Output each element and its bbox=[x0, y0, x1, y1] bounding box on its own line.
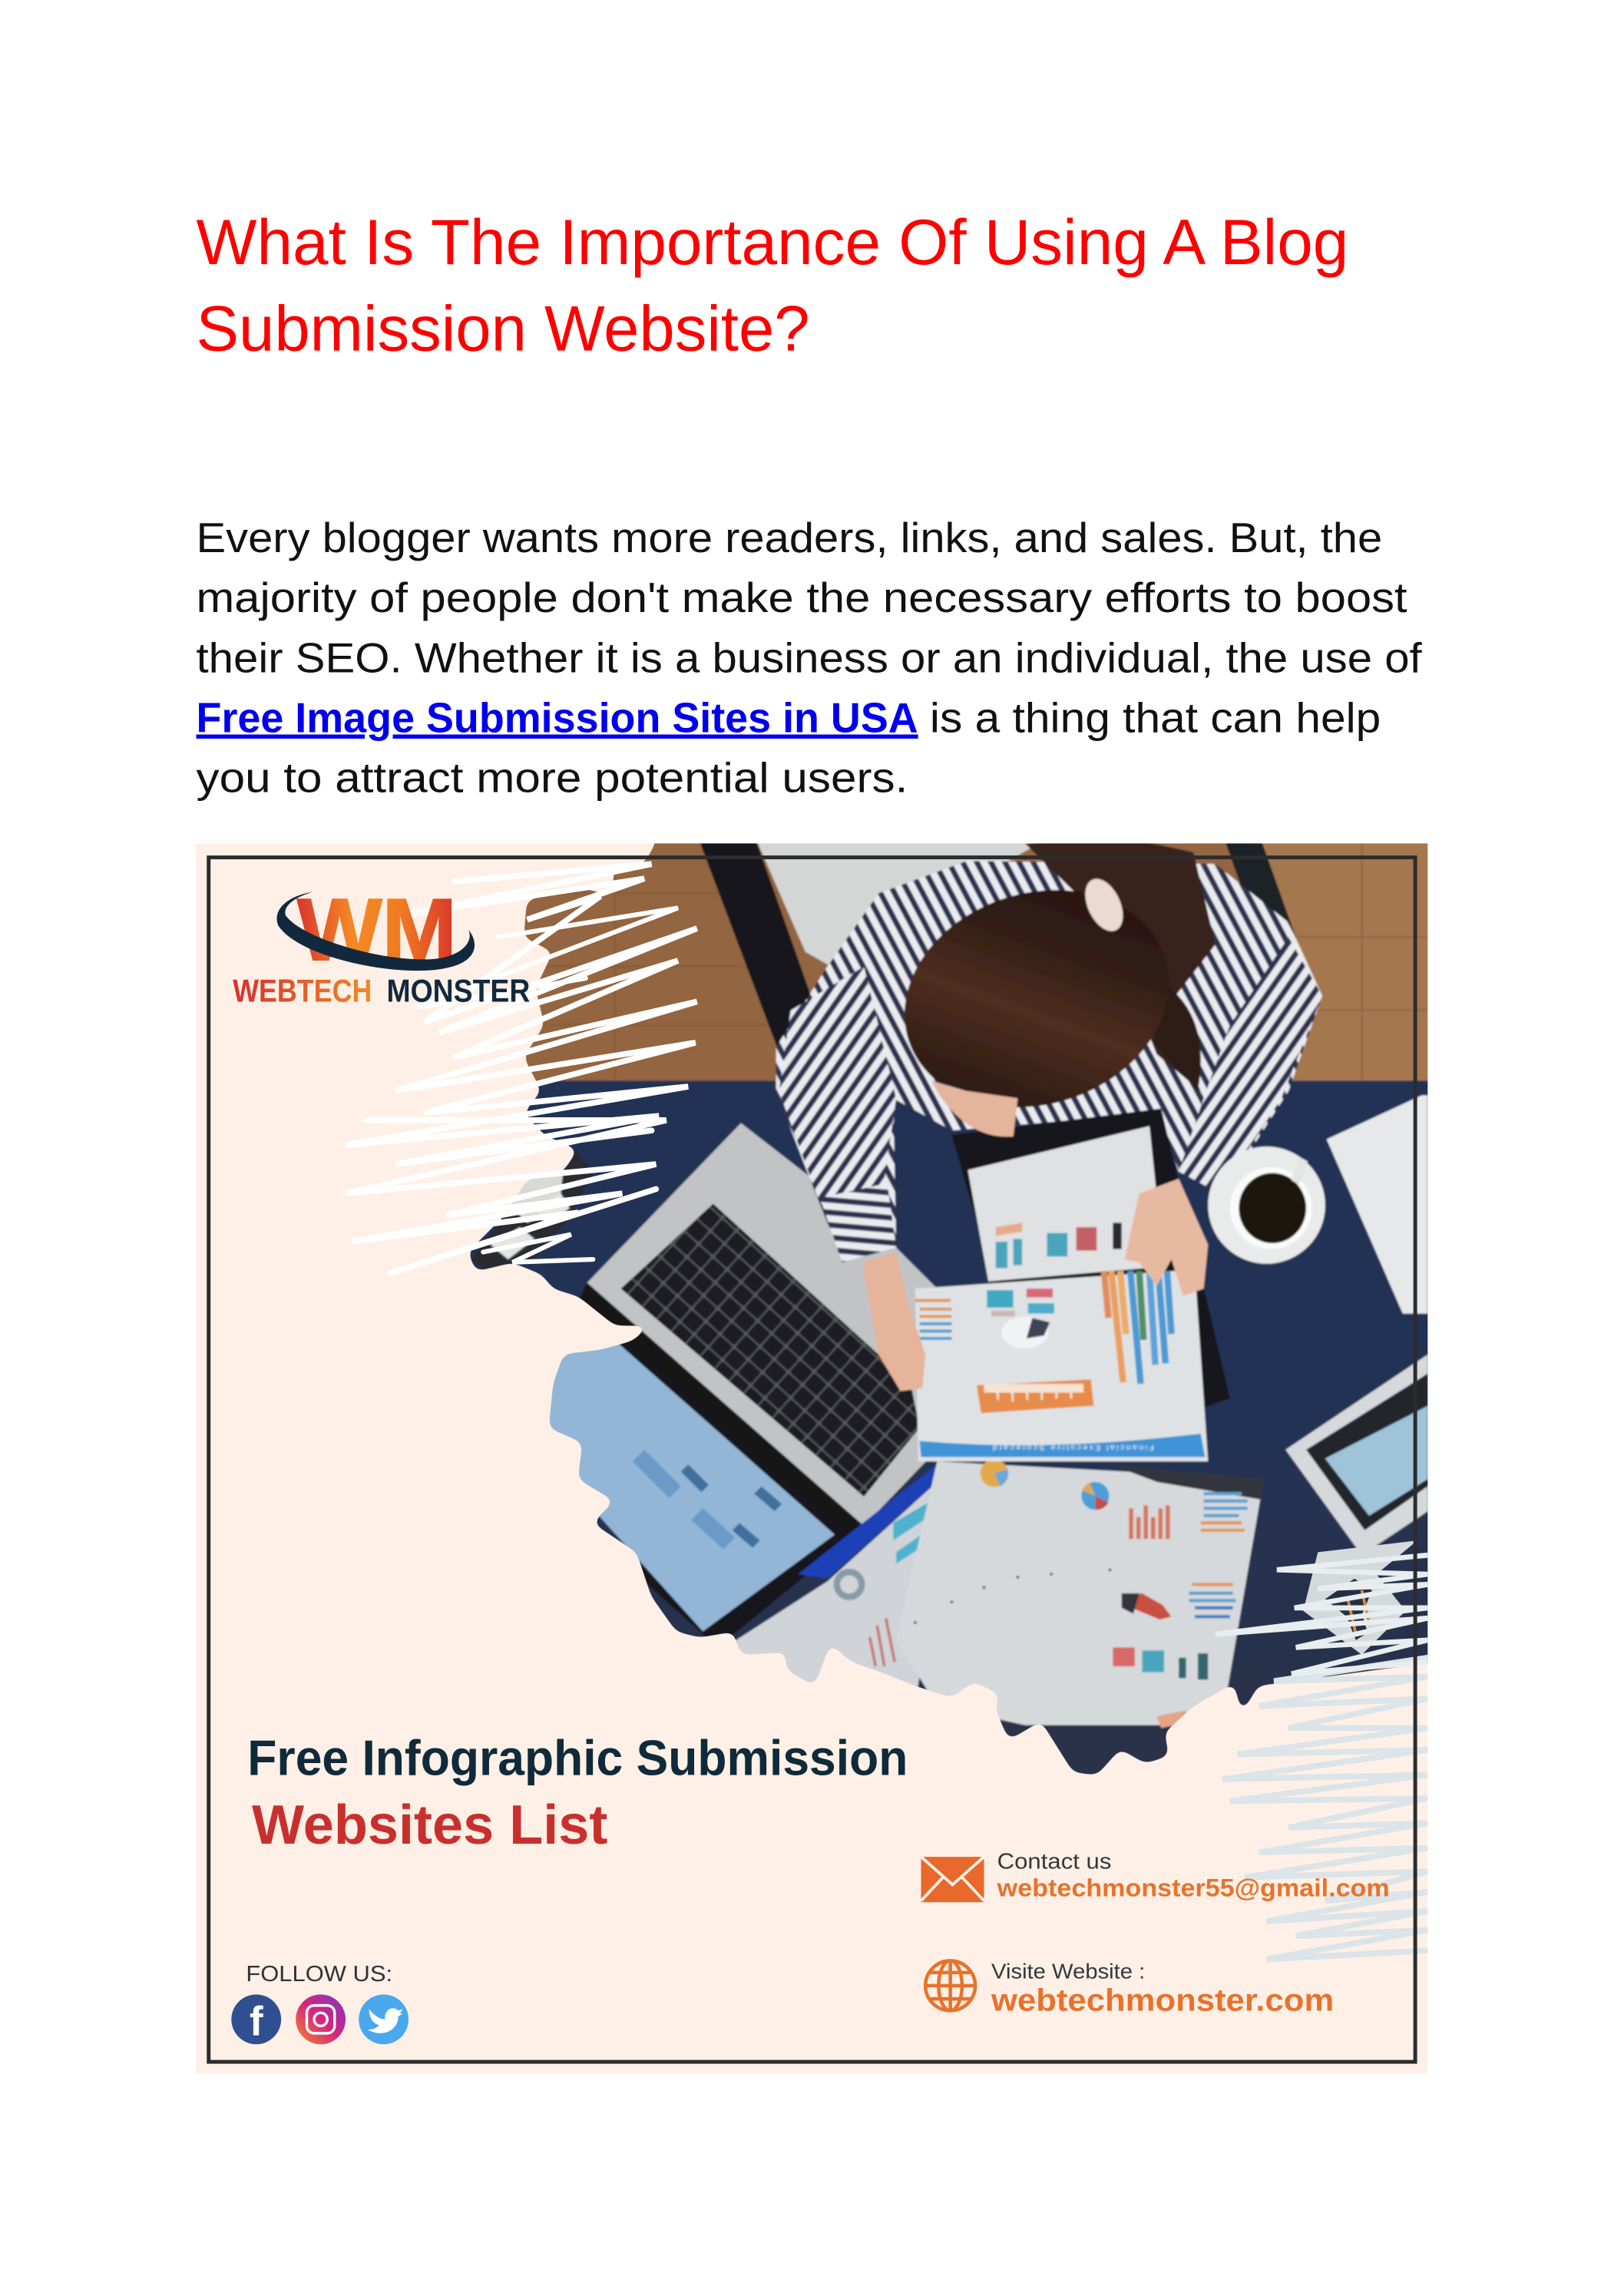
intro paragraph: you to attract more potential users. bbox=[197, 755, 908, 802]
panel: promo image bbox=[197, 835, 1435, 2073]
hair bbox=[903, 843, 1216, 1109]
upper report on black clipboard bbox=[952, 1109, 1230, 1409]
forehead bbox=[931, 1080, 1017, 1136]
right arm bbox=[1179, 937, 1322, 1193]
main report held by woman bbox=[915, 1269, 1208, 1461]
intro paragraph: their SEO. Whether it is a business or an individual, the use of bbox=[197, 634, 1423, 681]
chair bbox=[699, 843, 1296, 1047]
follow us bbox=[231, 1962, 408, 2045]
logo: Webtech Monster: WM bbox=[297, 881, 457, 979]
lower report pages bbox=[896, 1459, 1264, 1728]
icon: instagram bbox=[296, 1994, 346, 2044]
pencil holder with strokes bbox=[1216, 1540, 1427, 1674]
wood floor bbox=[524, 843, 1241, 1082]
headline: websites list: Websites List bbox=[252, 1794, 607, 1856]
white tablet top right bbox=[1327, 1095, 1427, 1314]
main report held by woman: Financial Executive Scorecard bbox=[993, 1443, 1154, 1451]
laptop base bbox=[578, 1123, 937, 1537]
icon: twitter bbox=[359, 1994, 408, 2044]
intro paragraph: Every blogger wants more readers, links, and sales. But, the bbox=[197, 514, 1382, 561]
intro paragraph: majority of people don't make the necessary efforts to boost bbox=[197, 574, 1407, 621]
title bbox=[197, 206, 1348, 365]
intro paragraph bbox=[197, 514, 1423, 802]
frame bbox=[209, 858, 1415, 2062]
left arm bbox=[779, 967, 896, 1204]
intro paragraph: is a thing that can help bbox=[930, 695, 1381, 742]
contact block: webtechmonster55@gmail.com bbox=[997, 1874, 1390, 1902]
logo: Webtech Monster bbox=[233, 881, 530, 1008]
website block bbox=[925, 1959, 1334, 2017]
blue-grey zigzag strokes bbox=[1222, 1658, 1427, 1960]
vertical bar chart bbox=[1104, 1271, 1172, 1384]
grey tablet right bbox=[1285, 1355, 1427, 1555]
left hand bbox=[862, 1252, 925, 1391]
title: What Is The Importance Of Using A Blog bbox=[197, 206, 1348, 278]
logo swoosh bbox=[277, 892, 475, 971]
chain pattern detail bbox=[471, 1150, 593, 1274]
website block: Visite Website : bbox=[991, 1959, 1145, 1983]
white scribble strokes bbox=[346, 864, 697, 1274]
logo: Webtech Monster: MONSTER bbox=[386, 972, 530, 1008]
icon: envelope bbox=[921, 1857, 984, 1902]
link text: Free Image Submission Sites in USA bbox=[197, 695, 918, 742]
laptop screen bbox=[550, 1342, 848, 1636]
title: Submission Website? bbox=[197, 293, 810, 365]
left paper with donut chart bbox=[736, 1487, 932, 1688]
navy desk bbox=[439, 1080, 1435, 1784]
contact block: Contact us bbox=[997, 1849, 1111, 1874]
icon: facebook bbox=[231, 1994, 281, 2045]
hair scrunchie bbox=[1078, 873, 1130, 937]
shirt bbox=[776, 861, 1322, 1259]
follow us: FOLLOW US: bbox=[246, 1962, 392, 1987]
icon: facebook: f bbox=[250, 2000, 263, 2045]
website block: webtechmonster.com bbox=[991, 1982, 1334, 2017]
logo: Webtech Monster: WEBTECH bbox=[233, 972, 372, 1008]
right hand bbox=[1125, 1179, 1208, 1296]
contact block bbox=[921, 1849, 1390, 1902]
photo: woman working at desk bbox=[439, 835, 1435, 1784]
blue folder edge bbox=[798, 1464, 937, 1579]
icon: globe bbox=[925, 1960, 975, 2010]
headline: free infographic submission: Free Infographic Submission bbox=[247, 1729, 908, 1785]
left cuff bbox=[820, 1183, 896, 1262]
coffee cup on saucer bbox=[1208, 1146, 1325, 1264]
